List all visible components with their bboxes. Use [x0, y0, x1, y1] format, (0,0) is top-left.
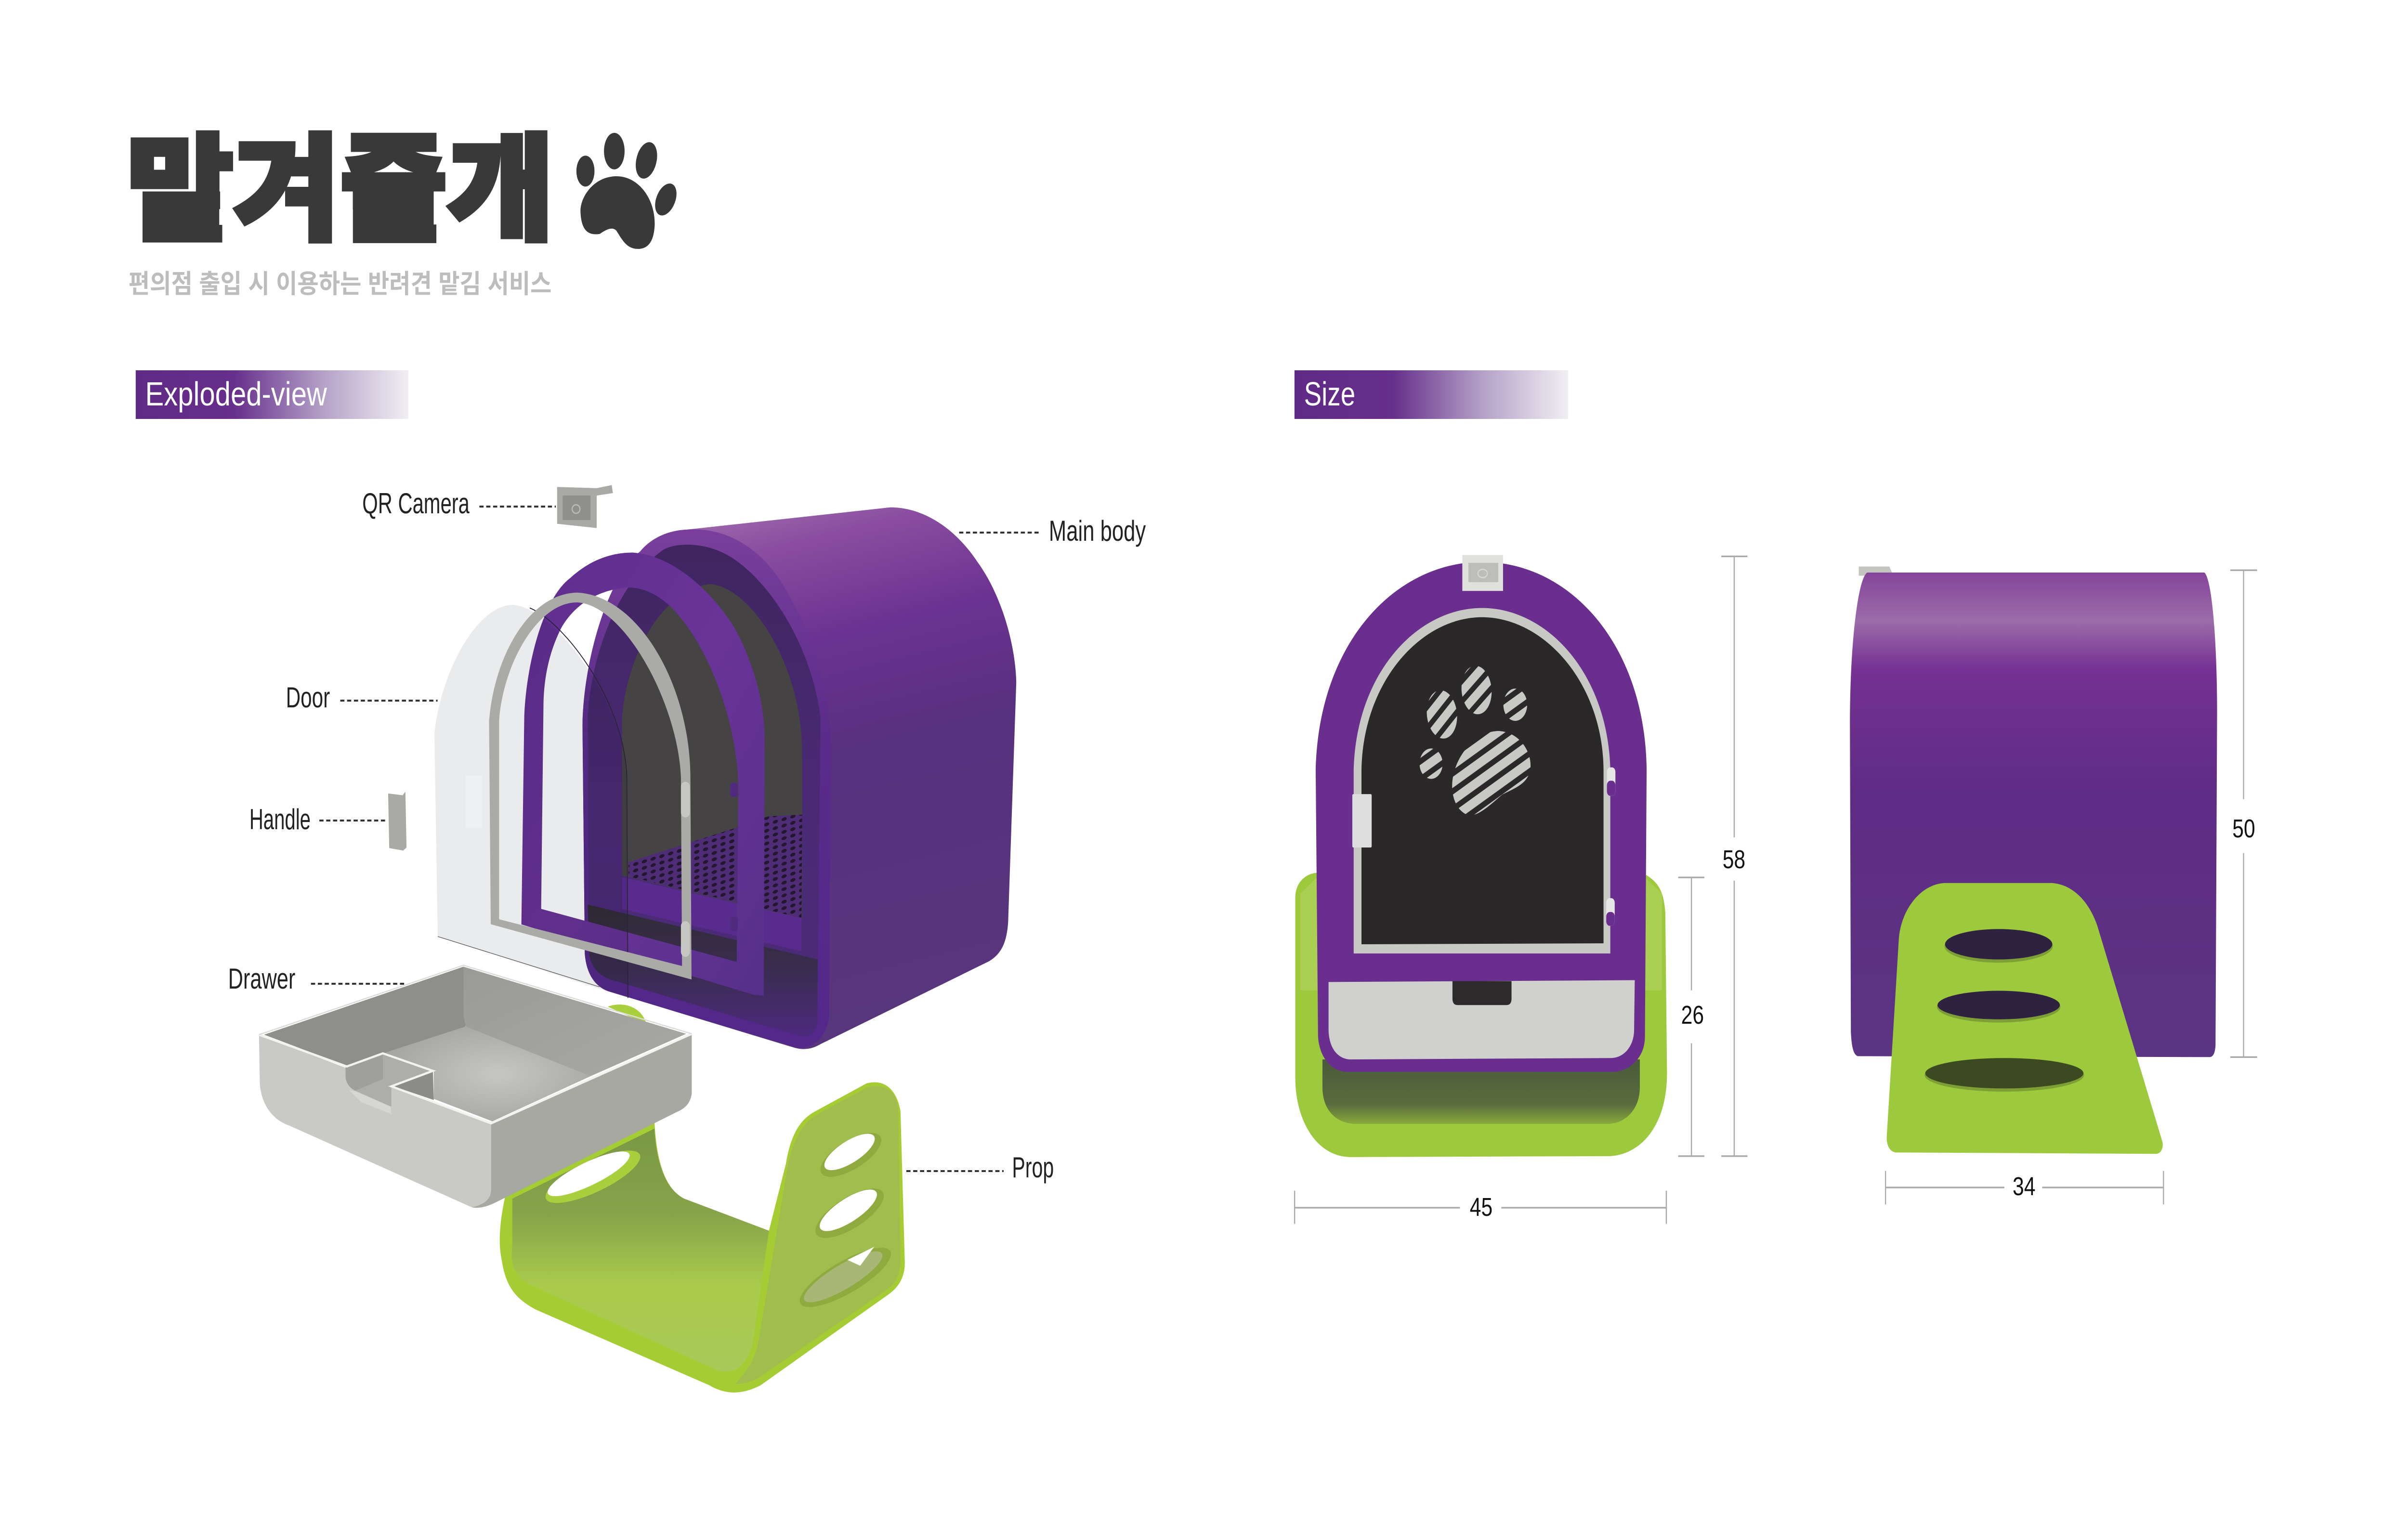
drawer notch: [1453, 981, 1512, 1005]
exploded-view diagram: main body: [582, 508, 1016, 1049]
purple body side: [1850, 573, 2217, 1057]
dimensions: side view: 34: [2013, 1172, 2035, 1201]
drawer bay: [588, 905, 818, 1037]
label: Door: Door: [286, 682, 330, 714]
drawer handle notch: [345, 1054, 434, 1114]
icon: striped paw: [1420, 662, 1531, 815]
section heading: size: Size: [1304, 376, 1355, 413]
camera peek: [1859, 567, 1894, 576]
drawer: [259, 965, 692, 1208]
dimensions: side view: 50: [2232, 814, 2255, 843]
drawer front: [1329, 980, 1635, 1059]
side view: [1850, 567, 2217, 1154]
dimensions: front view: [1295, 556, 1747, 1224]
hinges: [681, 782, 690, 957]
door frame ring: [522, 553, 765, 996]
dimensions: front view: 45: [1470, 1193, 1492, 1222]
title: 맡겨줄개: [127, 96, 554, 264]
icon: qr camera: [557, 485, 613, 528]
front view: [1296, 555, 1667, 1157]
prop holes: [535, 1126, 903, 1316]
drawer rim: [259, 1034, 692, 1123]
green stand side: [1887, 883, 2163, 1154]
icon: handle: [388, 792, 406, 850]
icon: paw logo: [576, 133, 680, 249]
dimensions: side view: [1885, 570, 2257, 1204]
label: Main body: Main body: [1049, 515, 1146, 547]
label: QR Camera: QR Camera: [362, 488, 470, 520]
purple body front: [1316, 562, 1647, 1072]
label: Handle: Handle: [249, 804, 311, 835]
label: Drawer: Drawer: [228, 963, 295, 995]
section heading: exploded-view: Exploded-view: [145, 376, 327, 413]
label: Prop: Prop: [1012, 1152, 1054, 1184]
leader lines: [311, 507, 1040, 1171]
door glass dark: [1361, 617, 1604, 944]
hinges: [1606, 768, 1615, 926]
shelf band: [622, 877, 801, 951]
subtitle: 편의점 출입 시 이용하는 반려견 맡김 서비스: [129, 270, 551, 299]
section heading: exploded-view: [136, 370, 408, 419]
section heading: size: [1295, 370, 1568, 419]
green stand front: [1296, 873, 1667, 1157]
door handle: [1352, 794, 1372, 847]
door frame front: [1354, 608, 1610, 953]
dimensions: front view: 58: [1723, 845, 1745, 874]
floor mesh: [628, 815, 802, 918]
glass door panel: [388, 485, 692, 998]
door metal frame: [489, 593, 692, 979]
dimensions: front view: 26: [1681, 1001, 1704, 1030]
qr camera: [1462, 555, 1503, 591]
prop (green stand): [500, 1004, 905, 1393]
back wall: [622, 584, 802, 919]
